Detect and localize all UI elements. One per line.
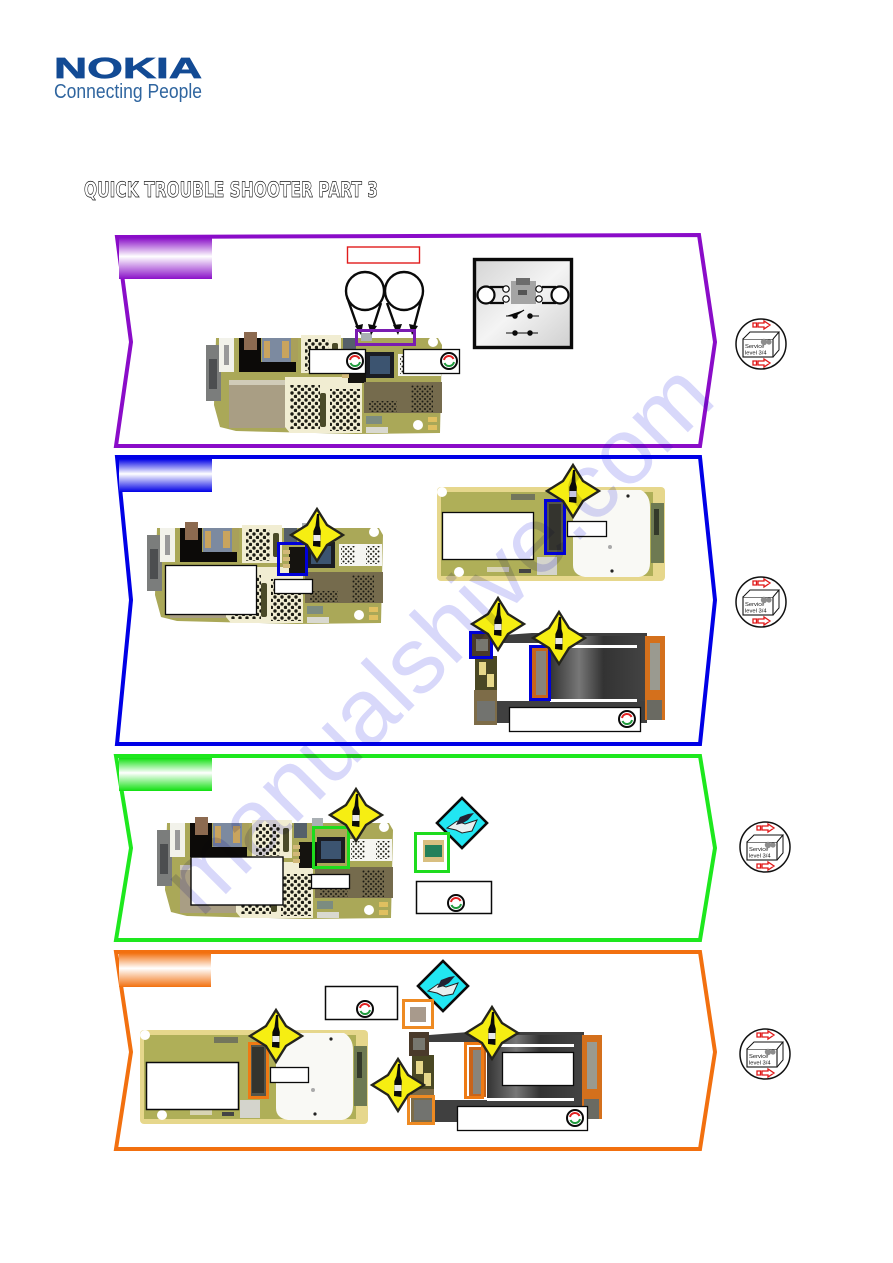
- label box: [166, 566, 256, 614]
- label box: [191, 857, 283, 905]
- highlight: [314, 828, 348, 868]
- panel: blue: [117, 457, 715, 744]
- replace part icon: [437, 798, 487, 848]
- label box: [502, 1052, 574, 1086]
- label box right: [404, 350, 460, 374]
- callout circles with arrows: [346, 272, 423, 335]
- highlight: [530, 646, 550, 700]
- small label box: [270, 1068, 308, 1082]
- heading tab: orange: [119, 953, 211, 987]
- watermark: manualshive.com: [141, 342, 732, 933]
- small label box: [312, 874, 350, 888]
- title: QUICK TROUBLE SHOOTER PART 3: [84, 178, 378, 202]
- adhesive warning star: [372, 1059, 424, 1111]
- flex cable: [409, 1032, 602, 1124]
- circuit board: [206, 332, 442, 434]
- switch diagram: [474, 260, 572, 348]
- heading tab: blue: [119, 459, 212, 492]
- label box: [458, 1106, 588, 1130]
- circuit board: bottom side: [140, 1030, 368, 1124]
- label box: [510, 708, 640, 732]
- logo: Nokia Connecting People: NOKIA: [54, 53, 202, 85]
- highlight: [278, 544, 306, 574]
- replace part icon: [418, 961, 468, 1011]
- label box: [416, 882, 492, 914]
- adhesive warning star: [291, 509, 343, 561]
- flex cable: [472, 633, 665, 725]
- service level icon: purple row: [736, 319, 786, 369]
- service level icon: blue row: [736, 577, 786, 627]
- small label box: [568, 522, 606, 536]
- adhesive warning star: [466, 1007, 518, 1059]
- highlight: [466, 1044, 482, 1098]
- circuit board: bottom side: [437, 487, 665, 581]
- highlight: switches: [356, 330, 414, 344]
- highlight: [408, 1096, 434, 1124]
- circuit board: [157, 817, 393, 919]
- label box: [442, 512, 534, 560]
- panel: green: [116, 756, 715, 940]
- adhesive warning star: [472, 598, 524, 650]
- red label box: [348, 247, 420, 263]
- heading tab: green: [119, 758, 212, 791]
- panel: purple: [116, 235, 715, 446]
- heading tab: purple: [119, 238, 212, 279]
- circuit board: top side: [147, 522, 383, 624]
- service level icon: green row: [740, 822, 790, 872]
- highlighted component: [416, 834, 448, 872]
- label box: [146, 1062, 238, 1110]
- adhesive warning star: [547, 465, 599, 517]
- adhesive warning star: [330, 789, 382, 841]
- label box: [326, 986, 398, 1020]
- service level icon: orange row: [740, 1029, 790, 1079]
- small label box: [274, 580, 312, 594]
- highlight: [546, 500, 564, 554]
- adhesive warning star: [250, 1010, 302, 1062]
- highlight: [470, 632, 492, 658]
- highlighted component: [404, 1000, 432, 1028]
- logo: Nokia Connecting People: Connecting People: [54, 81, 202, 103]
- logo: Nokia Connecting People: [54, 53, 202, 103]
- adhesive warning star: [533, 612, 585, 664]
- highlight: [250, 1044, 268, 1098]
- label box left: [310, 350, 366, 374]
- panel: orange: [116, 952, 715, 1149]
